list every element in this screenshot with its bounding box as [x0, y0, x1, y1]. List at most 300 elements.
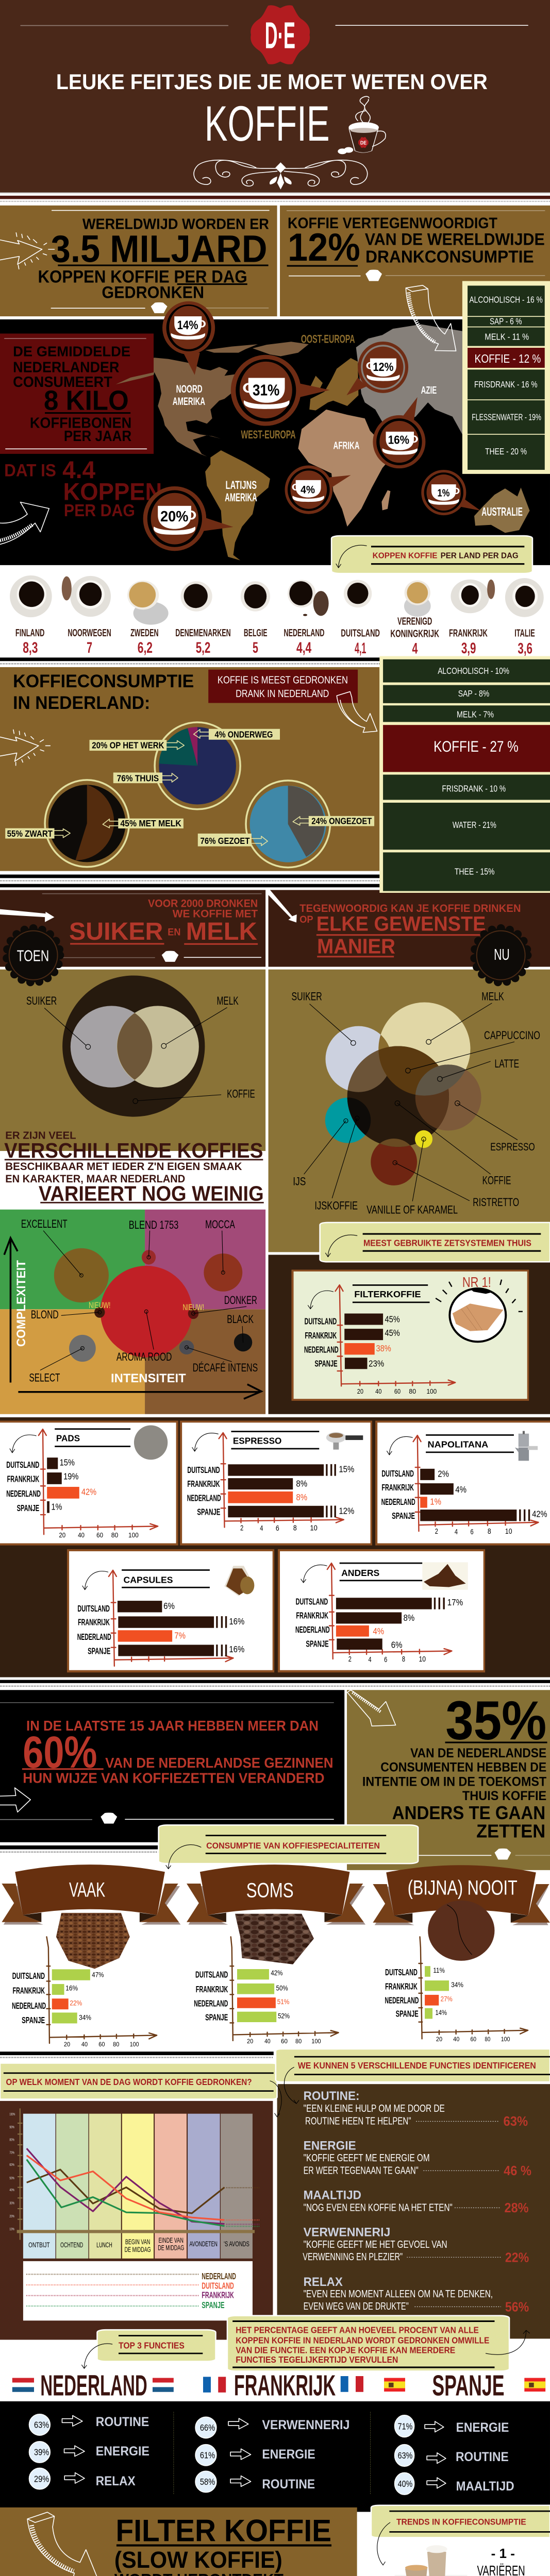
panel: moment van de dag line chart: 'S AVONDS	[224, 2240, 249, 2248]
panel: venn nu	[269, 970, 550, 1252]
section: zetsystemen charts	[0, 1417, 550, 1677]
chart: soms: DUITSLAND	[195, 1970, 228, 1979]
pin: 12 percent east europe: 12%	[373, 360, 393, 374]
chart card: napolitana: 1%	[430, 1497, 441, 1506]
country numbers: 6,2	[138, 639, 153, 656]
chart card: capsules: NEDERLAND	[77, 1632, 111, 1642]
section: header: D·E	[265, 15, 295, 57]
callout: top 3 functies: TOP 3 FUNCTIES	[119, 2341, 185, 2350]
country labels	[15, 616, 535, 639]
section: header	[0, 0, 550, 316]
panel: moment van de dag line chart	[0, 2101, 273, 2340]
chart: vaak: SPANJE	[22, 2015, 45, 2025]
chart card: napolitana: DUITSLAND	[381, 1469, 414, 1479]
chart card: anders: 4%	[373, 1626, 384, 1636]
panel: moment van de dag line chart: BEGIN VAN	[125, 2238, 150, 2246]
panel: 12 procent	[280, 206, 550, 316]
chart card: pads: 60	[96, 1532, 103, 1539]
callout: top 3 functies	[82, 2330, 215, 2368]
text: dat is 4.4 koppen per dag: DAT IS	[4, 461, 56, 480]
country numbers: 8,3	[23, 639, 38, 656]
pie label: op het werk	[90, 740, 184, 751]
panel: trends	[357, 2505, 550, 2576]
chart card: anders: SPANJE	[306, 1639, 329, 1649]
pin: 1 percent australia: 1%	[438, 487, 449, 499]
country labels: DENEMENARKEN	[175, 627, 231, 638]
arrow: sketch	[27, 2512, 98, 2576]
chart: bijna nooit: 100	[501, 2036, 510, 2043]
chart card: napolitana: NEDERLAND	[381, 1497, 415, 1507]
arrow: curved sketch arrow to map	[0, 502, 49, 545]
callout: de gemiddelde nederlander	[0, 333, 154, 454]
pin: 4 percent africa	[285, 465, 351, 514]
panel: moment van de dag line chart: DE MIDDAG	[158, 2244, 184, 2252]
callout: koppen koffie per land per dag: KOPPEN KOFFIE	[373, 551, 438, 560]
pie label: onderweg	[194, 729, 280, 740]
map labels: NOORD	[176, 383, 203, 395]
pin: 1 percent australia	[421, 470, 480, 515]
image: coffee beans pile	[56, 1913, 130, 1969]
chart card: filterkoffie: 100	[426, 1387, 437, 1395]
panel: 3.5 miljard: KOPPEN KOFFIE PER DAG	[38, 267, 247, 286]
chart card: filterkoffie	[291, 1269, 529, 1401]
panel: venn toen: MELK	[217, 995, 239, 1007]
nederland functies: 29%	[34, 2474, 49, 2484]
chart: soms	[194, 1937, 339, 2045]
panel: koffieconsumptie in nederland: KOFFIECONSUMPTIE	[13, 671, 194, 691]
panel: moment van de dag line chart: FRANKRIJK	[202, 2290, 234, 2300]
panel: koffieconsumptie in nederland: 4% ONDERWEG	[214, 730, 273, 739]
table: dutch drink consumption	[379, 656, 550, 893]
panel: moment van de dag line chart: DUITSLAND	[202, 2280, 234, 2291]
chart: bijna nooit: 34%	[451, 1980, 463, 1989]
pin: 20 percent latin america: 20%	[160, 508, 188, 524]
frankrijk functies: ROUTINE	[262, 2477, 315, 2492]
chart: vaak: 20	[64, 2041, 70, 2048]
table: dutch drink consumption: SAP - 8%	[458, 688, 489, 699]
section: specialiteiten bars	[0, 1901, 550, 2340]
text: dat is 4.4 koppen per dag: 4.4	[62, 456, 95, 483]
chart: vaak: 100	[130, 2041, 139, 2048]
chart: soms: 40	[264, 2038, 271, 2045]
chart: bijna nooit: 40	[453, 2036, 460, 2043]
badge: nu	[474, 928, 527, 982]
badge: toen	[7, 928, 60, 982]
panel: functies: ENERGIE	[304, 2139, 356, 2153]
chart card: pads: PADS	[56, 1433, 80, 1443]
chart card: anders: 2	[348, 1655, 352, 1663]
section: world map: KOPPEN	[63, 478, 162, 505]
section: filter koffie	[0, 2505, 550, 2576]
panel: moment van de dag line chart: NEDERLAND	[202, 2271, 236, 2281]
chart: intensiteit and complexiteit quadrant: BLEND 1753	[129, 1219, 178, 1231]
chart: intensiteit and complexiteit quadrant: BLOND	[31, 1309, 59, 1321]
panel: nu text: MANIER	[317, 935, 395, 958]
chart: bijna nooit: SPANJE	[396, 2009, 419, 2019]
panel: toen text: EN	[168, 927, 180, 938]
country labels: NOORWEGEN	[68, 627, 111, 638]
pin: 14 percent north america: 14%	[177, 318, 198, 332]
icon: coffee filter: NR 1!	[462, 1275, 491, 1291]
text: verschillende koffies: BESCHIKBAAR MET IEDER Z'N EIGEN SMAAK	[5, 1160, 242, 1173]
chart: vaak: 34%	[79, 2013, 91, 2022]
arrow: sparkle arrow	[0, 730, 50, 766]
frankrijk functies: ENERGIE	[262, 2447, 315, 2462]
chart: soms: 50%	[276, 1984, 288, 1992]
chart: soms: 100	[311, 2038, 321, 2045]
spanje functies	[395, 2415, 514, 2495]
panel: moment van de dag line chart: 30%	[9, 2201, 14, 2206]
chart card: filterkoffie: 38%	[376, 1344, 391, 1353]
chart card: anders: 6%	[391, 1640, 403, 1650]
chart: intensiteit and complexiteit quadrant: NIEUW!	[89, 1301, 110, 1310]
chart card: pads: 20	[59, 1532, 65, 1539]
country numbers: 5,2	[196, 639, 210, 656]
icon: coffee filter	[436, 1275, 523, 1342]
chart: bijna nooit: 11%	[433, 1966, 445, 1974]
chart card: napolitana: 4	[455, 1528, 458, 1536]
chart card: anders: 10	[419, 1655, 426, 1663]
chart card: napolitana	[375, 1421, 550, 1546]
icon: portafilter	[326, 1432, 363, 1450]
chart card: anders: 8%	[404, 1613, 414, 1623]
chart card: pads: 42%	[81, 1487, 96, 1497]
panel: toen text: WE KOFFIE MET	[173, 908, 258, 920]
panel: moment van de dag line chart: 10%	[9, 2227, 14, 2231]
country numbers: 3,9	[461, 640, 476, 656]
image: glasses	[395, 2545, 467, 2576]
chart card: anders: NEDERLAND	[295, 1625, 330, 1635]
panel: toen text: MELK	[186, 917, 257, 945]
chart: soms: 51%	[277, 1997, 289, 2006]
section: gezinnen en 35 procent	[0, 1680, 550, 1925]
panel: moment van de dag line chart: ONTBIJT	[28, 2241, 50, 2249]
chart: vaak: DUITSLAND	[12, 1971, 45, 1981]
chart card: filterkoffie: 23%	[369, 1359, 384, 1368]
chart card: espresso: DUITSLAND	[187, 1465, 220, 1475]
chart: bijna nooit: 80	[485, 2036, 490, 2043]
chart card: napolitana: FRANKRIJK	[381, 1483, 414, 1493]
ribbon: vaak	[2, 1865, 180, 1925]
chart: bijna nooit: 14%	[435, 2008, 447, 2016]
pin: 31 percent west europe: 31%	[253, 381, 279, 399]
chart card: espresso: 6	[276, 1524, 279, 1532]
country numbers: 4,4	[296, 639, 311, 656]
panel: moment van de dag line chart: 90%	[9, 2125, 14, 2129]
chart card: anders: FRANKRIJK	[296, 1611, 328, 1620]
panel: functies: VERWENNERIJ	[304, 2225, 390, 2239]
chart: soms: SPANJE	[205, 2012, 228, 2022]
panel: top 3 per land: ROUTINE	[96, 2415, 149, 2429]
panel: moment van de dag line chart: 100%	[9, 2112, 15, 2116]
pin: 16 percent asia: 16%	[388, 433, 409, 446]
chart legend	[23, 2261, 253, 2320]
pin: 4 percent africa: 4%	[301, 484, 315, 496]
chart card: anders: DUITSLAND	[296, 1597, 328, 1606]
ribbon: soms	[187, 1865, 365, 1925]
arrow: sparkle arrow	[0, 233, 54, 269]
map labels: LATIJNS	[226, 479, 257, 492]
callout: de gemiddelde nederlander: PER JAAR	[64, 428, 131, 445]
spanje functies: 71%	[398, 2421, 412, 2431]
frankrijk functies: 66%	[200, 2423, 215, 2433]
section: verschillende koffies	[0, 1129, 550, 1414]
chart card: espresso: 15%	[339, 1464, 354, 1474]
chart card: napolitana: 2%	[438, 1469, 449, 1479]
chart card: espresso: SPANJE	[197, 1507, 220, 1517]
chart: vaak	[12, 1937, 157, 2048]
chart card: pads: SPANJE	[17, 1503, 39, 1513]
pie label: op het werk: 20% OP HET WERK	[92, 740, 164, 750]
chart card: filterkoffie: 45%	[385, 1328, 400, 1338]
chart card: capsules: 16%	[229, 1617, 244, 1626]
heading: nederland	[12, 2369, 174, 2402]
panel: top 3 per land: VERWENNERIJ	[262, 2418, 349, 2432]
chart card: filterkoffie: NEDERLAND	[304, 1345, 339, 1354]
arrow: to table	[337, 691, 377, 733]
chart: vaak: 60	[98, 2041, 105, 2048]
chart: intensiteit and complexiteit quadrant: NIEUW!	[183, 1303, 204, 1312]
spanje functies: 63%	[398, 2451, 412, 2461]
panel: 60 procent	[0, 1690, 344, 1842]
chart card: filterkoffie: DUITSLAND	[305, 1316, 337, 1326]
heading: spanje	[384, 2369, 545, 2402]
chart: intensiteit and complexiteit quadrant: MOCCA	[205, 1218, 235, 1231]
chart card: capsules: 6%	[163, 1601, 175, 1611]
callout: koppen koffie per land per dag	[331, 536, 532, 573]
country numbers: 7	[87, 639, 92, 656]
map labels: AFRIKA	[333, 439, 359, 451]
chart: intensiteit and complexiteit quadrant: INTENSITEIT	[111, 1371, 186, 1385]
panel: toen text: VOOR 2000 DRONKEN	[148, 897, 258, 910]
pie label: thuis	[113, 772, 178, 783]
country numbers: 4	[412, 640, 418, 657]
chart card: napolitana: 8	[488, 1527, 491, 1535]
map labels: OOST-EUROPA	[301, 333, 355, 346]
section: header: 3.5 MILJARD	[51, 227, 268, 270]
country labels: DUITSLAND	[341, 628, 380, 639]
panel: venn nu: MELK	[481, 990, 504, 1003]
chart: vaak: NEDERLAND	[12, 2001, 46, 2011]
panel: moment van de dag line chart: EINDE VAN	[159, 2236, 184, 2244]
chart card: napolitana: NAPOLITANA	[428, 1439, 488, 1449]
text: verschillende koffies	[4, 1129, 264, 1205]
chart card: espresso: 8%	[296, 1492, 307, 1502]
panel: nu text: OP	[299, 914, 313, 925]
callout: consumptie van koffiespecialiteiten	[159, 1825, 418, 1869]
trend 1 text	[477, 2546, 525, 2576]
pie label: ongezoet	[293, 816, 374, 826]
callout: op welk moment: OP WELK MOMENT VAN DE DAG WORDT KOFFIE GEDRONKEN?	[6, 2077, 252, 2087]
icon: ground coffee	[422, 1562, 468, 1590]
chart: intensiteit and complexiteit quadrant: SELECT	[29, 1372, 60, 1384]
chart: soms: NEDERLAND	[194, 1998, 228, 2009]
frankrijk functies	[195, 2417, 349, 2493]
chart: vaak: 16%	[65, 1984, 78, 1992]
section: cups per country: 24% ONGEZOET	[311, 816, 372, 826]
chart card: capsules: SPANJE	[88, 1646, 110, 1656]
chart: bijna nooit: 60	[471, 2036, 476, 2043]
section: top 3 functies: NEDERLAND	[40, 2369, 147, 2402]
chart card: pads: NEDERLAND	[6, 1489, 41, 1499]
panel: 3.5 miljard	[0, 206, 277, 316]
chart card: pads: 100	[128, 1532, 139, 1539]
chart card: pads: 80	[111, 1532, 118, 1539]
callout: trends in koffieconsumptie	[371, 2505, 550, 2565]
panel: filter koffie heading: (SLOW KOFFIE)	[114, 2547, 282, 2573]
chart card: capsules: 16%	[229, 1645, 244, 1654]
panel: toen text: SUIKER	[69, 917, 163, 945]
chart: vaak: FRANKRIJK	[12, 1986, 45, 1995]
section: verschillende koffies: VARIEERT NOG WEINIG	[39, 1182, 264, 1205]
panel: koffieconsumptie in nederland	[0, 667, 379, 871]
nederland functies: RELAX	[96, 2474, 136, 2488]
chart: soms: 60	[281, 2038, 288, 2045]
callout: de gemiddelde nederlander: DE GEMIDDELDE	[13, 344, 130, 360]
chart: bijna nooit	[385, 1937, 528, 2043]
chart: vaak: 80	[113, 2041, 119, 2048]
text: dat is 4.4 koppen per dag	[4, 456, 162, 520]
panel: functies: RELAX	[304, 2275, 343, 2289]
country labels: FINLAND	[15, 627, 44, 638]
chart card: napolitana: 6	[471, 1528, 474, 1536]
map labels: AZIE	[421, 384, 437, 396]
chart: vaak: 22%	[70, 1999, 82, 2007]
section: top 3 functies	[0, 2316, 550, 2512]
icon: moka pot	[515, 1431, 538, 1461]
map labels: WEST-EUROPA	[241, 428, 296, 441]
chart: soms: 42%	[271, 1969, 282, 1977]
chart card: filterkoffie: 80	[409, 1387, 416, 1395]
chart card: napolitana: SPANJE	[392, 1511, 415, 1521]
chart: bijna nooit: FRANKRIJK	[385, 1981, 418, 1991]
chart card: pads	[0, 1421, 178, 1546]
nederland functies: 39%	[34, 2447, 49, 2457]
icon: coffee cup sketch	[338, 96, 386, 154]
pie label: met melk	[103, 819, 184, 828]
axis label: complexiteit: COMPLEXITEIT	[14, 1260, 28, 1347]
world map continents	[116, 325, 530, 561]
chart card: filterkoffie: 60	[394, 1387, 401, 1395]
chart card: capsules: CAPSULES	[124, 1575, 173, 1585]
chart card: anders: 6	[384, 1655, 387, 1664]
chart: soms: 80	[295, 2038, 302, 2045]
chart legend: SPANJE	[202, 2300, 225, 2310]
chart card: filterkoffie: SPANJE	[314, 1359, 338, 1368]
country labels: ZWEDEN	[130, 627, 159, 638]
chart card: capsules: 7%	[174, 1631, 186, 1640]
panel: moment van de dag line chart: 40%	[9, 2188, 14, 2192]
badge: nu: NU	[494, 945, 510, 963]
panel: venn toen	[0, 970, 265, 1151]
panel: koffieconsumptie in nederland: KOFFIE IS MEEST GEDRONKEN	[218, 674, 348, 686]
chart: bijna nooit: DUITSLAND	[385, 1968, 418, 1977]
panel: venn nu: IJSKOFFIE	[314, 1200, 358, 1212]
chart card: anders: 4	[369, 1655, 372, 1664]
callout: de gemiddelde nederlander: KOFFIEBONEN	[30, 415, 131, 431]
icon: coffee pad	[134, 1425, 168, 1460]
chart card: filterkoffie: 20	[357, 1387, 363, 1395]
chart card: pads: 19%	[63, 1471, 78, 1481]
chart card: napolitana: 10	[505, 1527, 512, 1535]
chart card: espresso: FRANKRIJK	[187, 1479, 220, 1489]
panel: moment van de dag line chart: AVONDETEN	[189, 2240, 218, 2248]
chart card: anders: 8	[402, 1655, 405, 1663]
panel: koffieconsumptie in nederland: IN NEDERLAND:	[13, 692, 150, 713]
image: coffee beans group	[235, 1914, 314, 1964]
heading: frankrijk	[203, 2369, 363, 2402]
panel: functies: ROUTINE:	[304, 2089, 359, 2103]
pin: 12 percent east europe	[346, 342, 408, 395]
map labels: AMERIKA	[225, 491, 257, 504]
chart card: pads: 1%	[51, 1502, 62, 1512]
callout: de gemiddelde nederlander: NEDERLANDER	[13, 360, 119, 376]
panel: 35 procent	[347, 1690, 550, 1870]
section: world map	[0, 281, 550, 573]
table: dutch drink consumption: MELK - 7%	[457, 709, 494, 720]
section: verschillende koffies: DONKER	[224, 1294, 257, 1307]
cups row	[10, 575, 544, 625]
pin: 31 percent west europe	[231, 355, 330, 426]
panel: moment van de dag line chart: 50%	[9, 2176, 14, 2180]
chart card: napolitana: 2	[435, 1527, 438, 1535]
section: toen en nu: TOEN	[17, 947, 49, 965]
country labels: NEDERLAND	[284, 627, 324, 638]
panel: zetsystemen background	[269, 1255, 550, 1414]
panel: moment van de dag line chart: DE MIDDAG	[125, 2245, 151, 2253]
chart card: espresso: 10	[310, 1524, 318, 1532]
chart: bijna nooit: 27%	[441, 1995, 453, 2003]
panel: 12 procent: 12%	[288, 226, 360, 269]
chart card: capsules: FRANKRIJK	[78, 1617, 110, 1627]
ornament	[194, 160, 368, 190]
chart: soms: 20	[247, 2038, 253, 2045]
country labels: KONINGKRIJK	[390, 628, 439, 639]
panel: functies: MAALTIJD	[304, 2188, 361, 2201]
pin: 16 percent asia	[373, 397, 425, 468]
section: toen en nu	[0, 874, 550, 1252]
chart card: espresso: 2	[240, 1524, 243, 1532]
chart: bijna nooit: 20	[436, 2036, 442, 2043]
country numbers	[23, 639, 532, 657]
panel: moment van de dag line chart: LUNCH	[96, 2241, 112, 2249]
country numbers: 4,1	[355, 640, 366, 656]
chart: vaak: 47%	[92, 1971, 104, 1979]
frankrijk functies: 61%	[200, 2450, 215, 2460]
pie label: gezoet	[198, 834, 268, 846]
text: verschillende koffies: EN KARAKTER, MAAR NEDERLAND	[5, 1173, 185, 1185]
image: single coffee bean	[428, 1901, 494, 1961]
map labels	[173, 333, 523, 518]
chart card: filterkoffie: 45%	[385, 1314, 400, 1324]
arrow: sketch arrow to table	[406, 285, 456, 351]
text: dat is 4.4 koppen per dag: PER DAG	[64, 501, 135, 520]
chart card: pads: 15%	[60, 1458, 75, 1467]
panel: venn nu: SUIKER	[291, 990, 322, 1003]
chart: intensiteit and complexiteit quadrant: AROMA ROOD	[116, 1351, 172, 1363]
chart card: espresso: 8	[293, 1524, 297, 1532]
spanje functies: 40%	[398, 2479, 412, 2489]
callout: vijf functies	[276, 2049, 550, 2104]
callout: de gemiddelde nederlander: 8 KILO	[44, 385, 129, 416]
panel: filter koffie heading	[0, 2507, 357, 2576]
panel: moment van de dag line chart: 20%	[9, 2214, 14, 2218]
chart card: capsules	[67, 1549, 274, 1672]
chart card: pads: FRANKRIJK	[7, 1474, 39, 1484]
section: header: WERELDWIJD WORDEN ER	[82, 215, 269, 232]
panel: 3.5 miljard: GEDRONKEN	[102, 283, 204, 302]
panel: top 3 per land	[0, 2401, 550, 2512]
